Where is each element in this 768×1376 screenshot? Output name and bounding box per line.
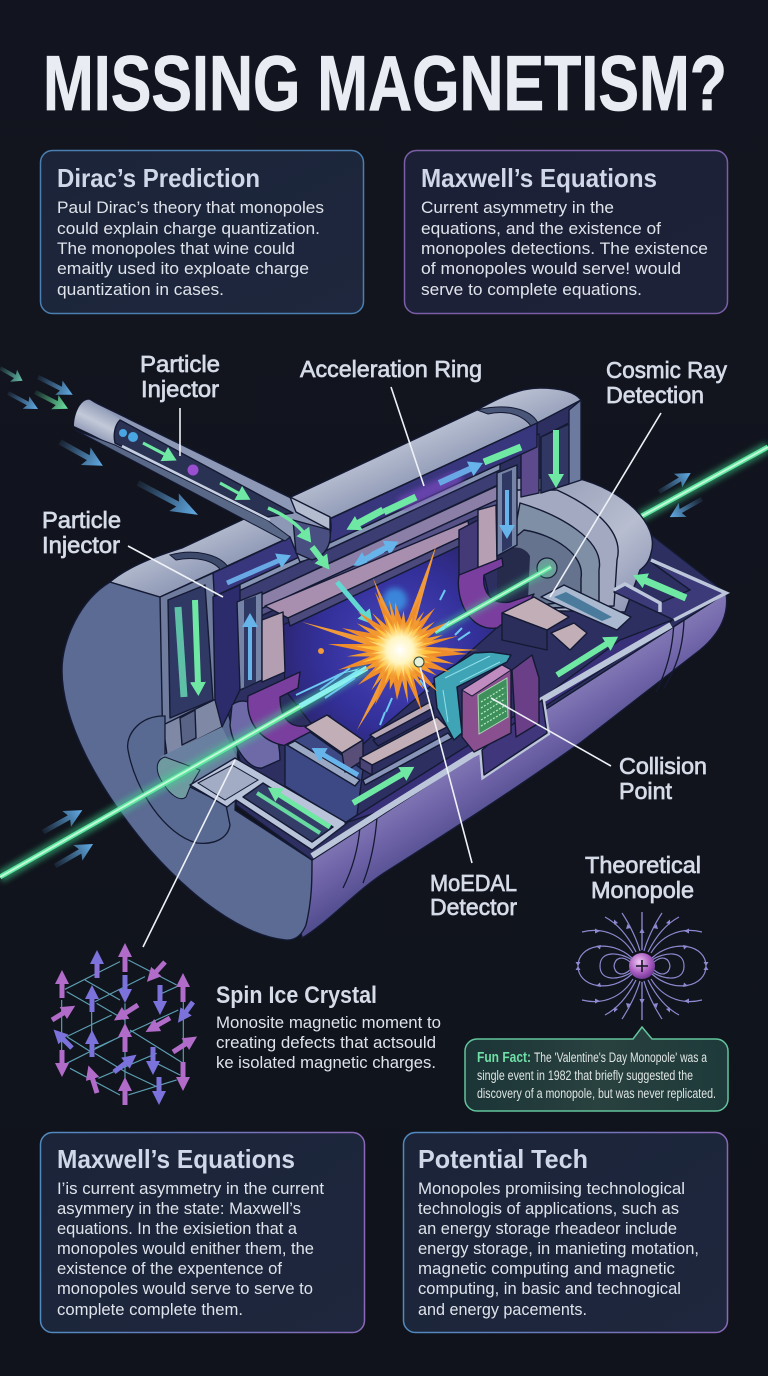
- right lower blocks: [502, 560, 726, 650]
- text block: Spin Ice Crystal: creating defects that actsould: [216, 1034, 436, 1052]
- left channel: [160, 573, 222, 755]
- text block: Dirac body: quantization in cases.: [57, 281, 224, 299]
- text block: Maxwell body: [421, 199, 708, 299]
- panel: Dirac's Prediction: [40, 150, 364, 314]
- lower left channel: [190, 758, 347, 850]
- text block: Spin Ice Crystal: ke isolated magnetic charges.: [216, 1054, 436, 1072]
- label: Collision Point: Point: [619, 778, 673, 804]
- beam through machine: [0, 567, 551, 877]
- label: Particle Injector top: Injector: [141, 376, 219, 402]
- label: Acceleration Ring: Acceleration Ring: [300, 356, 482, 382]
- beam: outer glow right: [640, 447, 768, 517]
- text block: Maxwell bottom body: [57, 1180, 324, 1319]
- text block: Potential Tech body: energy storage, in manieting motation,: [418, 1240, 699, 1258]
- panel: Maxwell's Equations top: [404, 150, 728, 314]
- collision starburst: [296, 543, 478, 730]
- text block: Dirac body: emaitly used ito exploate charge: [57, 260, 309, 278]
- label: Particle Injector left: Injector: [42, 532, 120, 558]
- heading: Maxwell's Equations: Maxwell’s Equations: [57, 1144, 295, 1174]
- text block: Maxwell bottom body: monopoles would enither them, the: [57, 1240, 314, 1258]
- detector: MoEDAL: [434, 652, 539, 752]
- label: Acceleration Ring: [300, 356, 482, 486]
- text block: Dirac body: The monopoles that wine could: [57, 240, 295, 258]
- label: MoEDAL Detector: Detector: [430, 894, 517, 920]
- text block: Maxwell body: equations, and the existence of: [421, 220, 661, 238]
- label: Theoretical Monopole: [585, 852, 701, 903]
- purple block upper right: [521, 434, 539, 497]
- arrows: upper channel: [227, 447, 521, 583]
- right wall and channel: [541, 400, 581, 493]
- injector tube: [74, 400, 365, 615]
- label: Cosmic Ray Detection: Detection: [606, 382, 704, 408]
- text block: Potential Tech body: and energy pacements.: [418, 1301, 587, 1319]
- text block: Spin Ice Crystal: Monosite magnetic moment to: [216, 1014, 441, 1032]
- panel: Maxwell's Equations bottom: [40, 1132, 364, 1332]
- text block: Potential Tech body: computing, in basic and technogical: [418, 1280, 681, 1298]
- right collar: [458, 558, 534, 628]
- callout: fun fact: The 'Valentine's Day Monopole' was a: [534, 1050, 707, 1065]
- text block: Maxwell body: monopoles detections. The existence: [421, 240, 708, 258]
- text block: Maxwell bottom body: asymmery in the state: Maxwell’s: [57, 1200, 301, 1218]
- text block: Spin Ice Crystal: [216, 982, 441, 1072]
- chamber: [283, 535, 500, 752]
- end face: [62, 573, 312, 940]
- heading: Potential Tech: Potential Tech: [418, 1144, 588, 1174]
- icon: monopole field lines: [576, 912, 708, 1020]
- rails: upper bands: [213, 423, 537, 621]
- text block: Maxwell body: Current asymmetry in the: [421, 199, 614, 217]
- text block: Potential Tech body: an energy storage rheadeor include: [418, 1220, 677, 1238]
- left blue channel: [237, 592, 262, 690]
- text block: Maxwell bottom body: complete complete them.: [57, 1301, 243, 1319]
- heading: Maxwell's Equations: Maxwell’s Equations: [421, 163, 657, 193]
- rail: lilac beam: [265, 521, 470, 618]
- label: Theoretical Monopole: Monopole: [591, 877, 694, 903]
- label: Particle Injector top: Particle: [140, 351, 220, 377]
- label: Cosmic Ray Detection: [550, 357, 727, 597]
- right end rings: [497, 478, 652, 618]
- left block: [262, 612, 285, 682]
- icon: spin ice crystal: [52, 955, 193, 1105]
- panel: Potential Tech: [404, 1132, 728, 1332]
- top shell: [110, 388, 581, 597]
- text block: Potential Tech body: magnetic computing and magnetic: [418, 1260, 675, 1278]
- callout: fun fact: [465, 1027, 728, 1111]
- text block: Dirac body: [57, 199, 324, 299]
- label: Collision Point: Collision: [619, 753, 707, 779]
- callout: fun fact: Fun Fact:: [477, 1050, 531, 1066]
- text block: Potential Tech body: [418, 1180, 699, 1319]
- label: Particle Injector left: [42, 507, 223, 597]
- icon: incoming particle arrows: [0, 362, 706, 874]
- text block: Maxwell bottom body: I’is current asymmetry in the current: [57, 1180, 324, 1198]
- text block: Dirac body: Paul Dirac’s theory that monopoles: [57, 199, 324, 217]
- text block: Maxwell body: serve to complete equations.: [421, 281, 642, 299]
- lower left floor: [285, 715, 363, 823]
- text block: Maxwell bottom body: equations. In the exisietion that a: [57, 1220, 298, 1238]
- lower mid rails: [345, 620, 672, 823]
- arrow: right channel: [553, 430, 559, 476]
- right top block: [458, 465, 534, 628]
- text block: Spin Ice Crystal: Spin Ice Crystal: [216, 982, 377, 1009]
- left wall: [213, 585, 240, 727]
- machine: accelerator cutaway: [0, 388, 727, 940]
- heading: Dirac's Prediction: Dirac’s Prediction: [57, 163, 260, 193]
- text block: Potential Tech body: technologis of applications, such as: [418, 1200, 679, 1218]
- label: Particle Injector top: [140, 351, 220, 456]
- text block: Maxwell body: of monopoles would serve! would: [421, 260, 681, 278]
- label: Cosmic Ray Detection: Cosmic Ray: [606, 357, 727, 383]
- interior: [213, 400, 726, 860]
- left tube: [230, 701, 280, 768]
- left cutout: [128, 716, 238, 843]
- label: Theoretical Monopole: Theoretical: [585, 852, 701, 878]
- callout: fun fact: single event in 1982 that briefly suggested the: [477, 1068, 693, 1083]
- left collar: [248, 672, 332, 746]
- label: Particle Injector left: Particle: [42, 507, 121, 533]
- label: MoEDAL Detector: [414, 657, 517, 920]
- text block: Dirac body: could explain charge quantization.: [57, 220, 320, 238]
- cut rim: [312, 625, 671, 856]
- text block: Potential Tech body: Monopoles promiising technological: [418, 1180, 685, 1198]
- arrows: lower green: [353, 643, 608, 803]
- lower body shell: [296, 593, 727, 938]
- label: MoEDAL Detector: MoEDAL: [430, 870, 517, 896]
- label: Collision Point: [491, 698, 707, 804]
- leader: spin ice to machine: [143, 760, 235, 947]
- text block: Maxwell bottom body: existence of the expentence of: [57, 1260, 282, 1278]
- text block: Maxwell bottom body: monopoles would serve to serve to: [57, 1280, 313, 1298]
